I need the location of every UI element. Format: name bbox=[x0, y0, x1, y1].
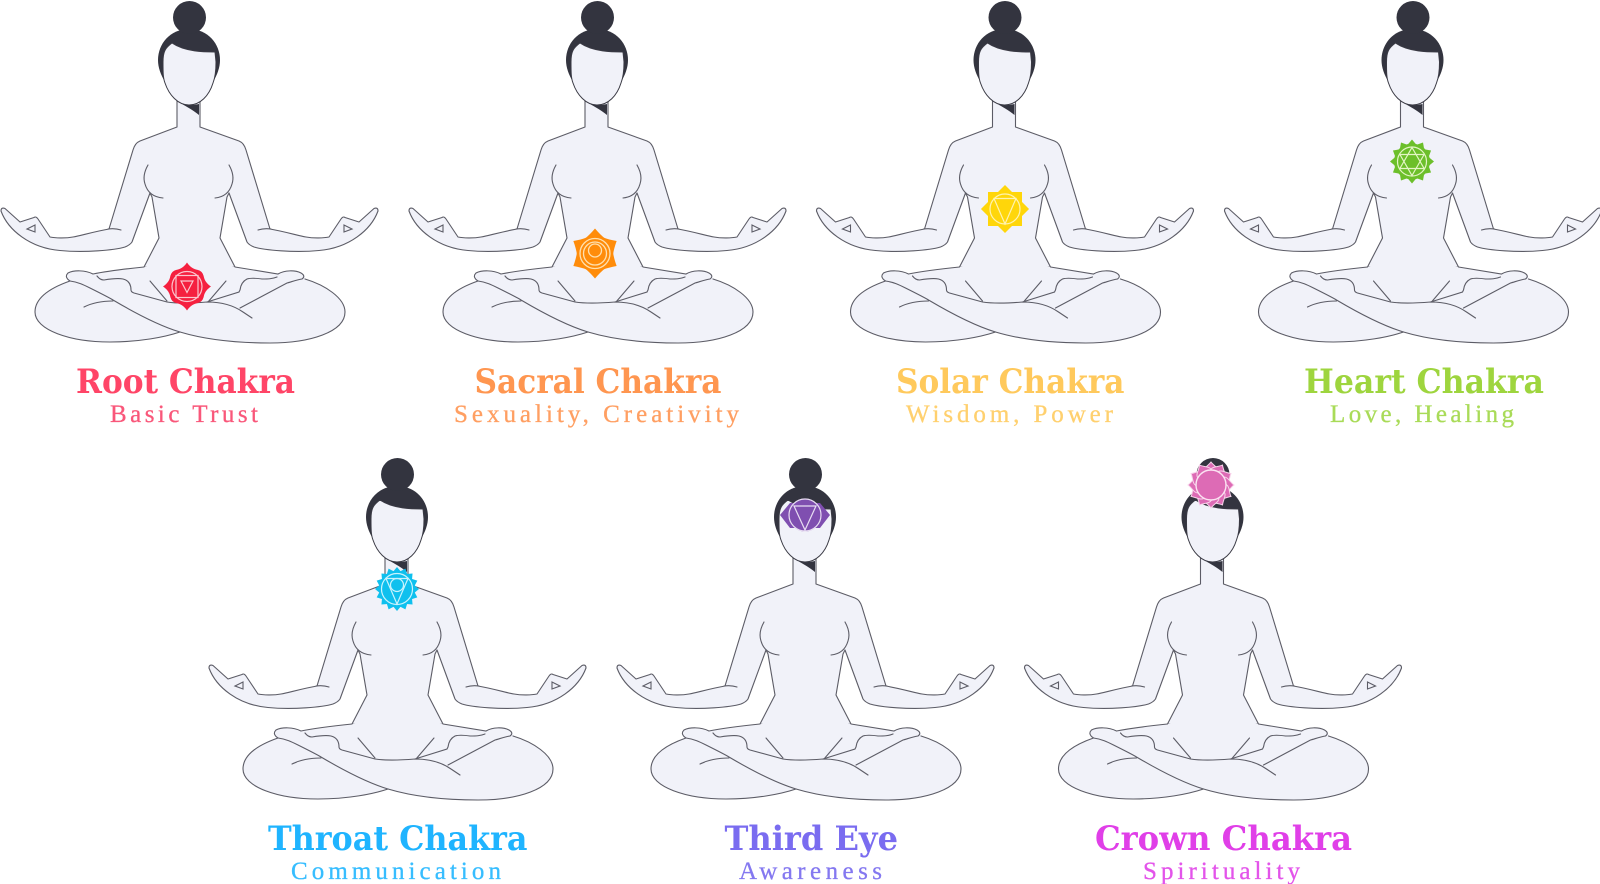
heading: Throat Chakra bbox=[268, 819, 528, 859]
panel: sacral chakra bbox=[409, 1, 786, 428]
heading: Root Chakra bbox=[76, 362, 295, 402]
meditating figure bbox=[1, 1, 378, 343]
heading: Solar Chakra bbox=[896, 362, 1124, 402]
meditating figure bbox=[1024, 458, 1402, 800]
subheading: Wisdom, Power bbox=[906, 401, 1114, 428]
meditating figure bbox=[1224, 1, 1600, 343]
icon: crown chakra symbol bbox=[1187, 461, 1235, 509]
panel: third eye bbox=[617, 458, 994, 884]
heading: Crown Chakra bbox=[1095, 819, 1352, 859]
subheading: Love, Healing bbox=[1330, 401, 1514, 428]
panel: heart chakra bbox=[1224, 1, 1600, 428]
meditating figure bbox=[816, 1, 1194, 343]
icon: throat chakra symbol bbox=[375, 567, 419, 611]
heading: Sacral Chakra bbox=[474, 362, 722, 402]
meditating figure bbox=[409, 1, 786, 343]
icon: sacral chakra symbol bbox=[568, 228, 622, 278]
panel: solar chakra bbox=[816, 1, 1194, 428]
panel: throat chakra bbox=[209, 458, 586, 884]
icon: root chakra symbol bbox=[163, 262, 211, 310]
subheading: Sexuality, Creativity bbox=[454, 401, 740, 428]
panel: crown chakra bbox=[1024, 458, 1402, 884]
panel: root chakra bbox=[1, 1, 378, 428]
icon: heart chakra symbol bbox=[1390, 140, 1434, 184]
icon: third eye symbol bbox=[780, 498, 830, 532]
meditating figure bbox=[617, 458, 994, 800]
heading: Third Eye bbox=[724, 819, 898, 859]
heading: Heart Chakra bbox=[1304, 362, 1544, 402]
icon: solar chakra symbol bbox=[981, 185, 1029, 233]
subheading: Basic Trust bbox=[110, 401, 258, 428]
meditating figure bbox=[209, 458, 586, 800]
